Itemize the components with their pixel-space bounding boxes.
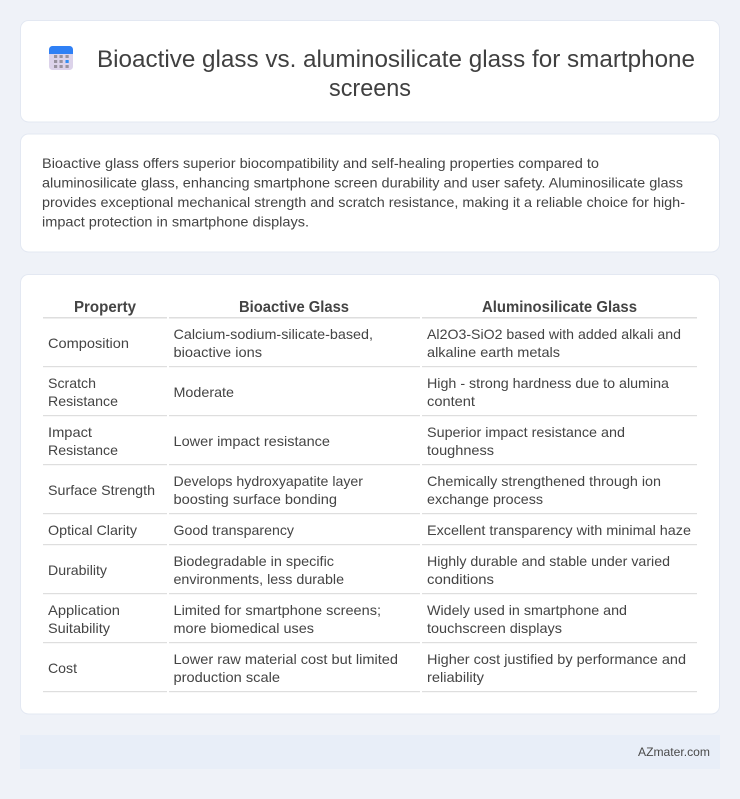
row: Optical Clarity	[48, 522, 691, 538]
row: Impact Resistance: Impact	[48, 424, 92, 440]
footer bar	[20, 735, 720, 769]
description text: impact protection in smartphone displays.	[42, 214, 309, 230]
panel: description card	[20, 134, 720, 252]
row: Optical Clarity: Excellent transparency with minimal haze	[427, 522, 691, 538]
table header row	[74, 299, 637, 316]
panel: title card	[20, 20, 720, 122]
row: Durability: Durability	[48, 562, 107, 578]
row: Durability: Highly durable and stable under varied	[427, 553, 670, 569]
row: Durability: environments, less durable	[174, 571, 344, 587]
description text: provides exceptional mechanical strength and scratch resistance, making it a reliable choice for high-	[42, 194, 685, 210]
row: Scratch Resistance: High - strong hardness due to alumina	[427, 375, 669, 391]
row: Surface Strength: boosting surface bonding	[174, 491, 337, 507]
row: Durability	[48, 553, 670, 587]
row: Scratch Resistance: content	[427, 393, 475, 409]
row: Impact Resistance	[48, 424, 625, 458]
row: Composition: Composition	[48, 335, 129, 351]
table header row: Aluminosilicate Glass	[482, 299, 637, 316]
row: Surface Strength: Chemically strengthened through ion	[427, 473, 661, 489]
row: Application Suitability: more biomedical uses	[174, 620, 314, 636]
row: Scratch Resistance: Resistance	[48, 393, 118, 409]
table header row: Bioactive Glass	[239, 299, 349, 316]
panel: comparison table	[20, 274, 720, 714]
row: Application Suitability: Application	[48, 602, 120, 618]
row: Composition: alkaline earth metals	[427, 344, 560, 360]
row: Composition: Calcium-sodium-silicate-based,	[174, 326, 373, 342]
row: Durability: Biodegradable in specific	[174, 553, 334, 569]
row: Cost: Higher cost justified by performance and	[427, 651, 686, 667]
row: Application Suitability	[48, 602, 627, 636]
row: Optical Clarity: Optical Clarity	[48, 522, 137, 538]
row: Application Suitability: Suitability	[48, 620, 110, 636]
row: Cost: production scale	[174, 669, 280, 685]
row: Composition: Al2O3-SiO2 based with added alkali and	[427, 326, 681, 342]
description text	[42, 155, 685, 230]
row: Scratch Resistance: Scratch	[48, 375, 96, 391]
row: Composition: bioactive ions	[174, 344, 262, 360]
row: Impact Resistance: toughness	[427, 442, 494, 458]
row: Durability: conditions	[427, 571, 494, 587]
title: Bioactive glass vs. aluminosilicate glass for smartphone	[97, 46, 695, 73]
row: Application Suitability: Widely used in smartphone and	[427, 602, 627, 618]
row: Impact Resistance: Lower impact resistance	[174, 433, 330, 449]
row: Optical Clarity: Good transparency	[174, 522, 294, 538]
footer bar: AZmater.com	[638, 745, 710, 759]
description text: Bioactive glass offers superior biocompatibility and self-healing properties compared to	[42, 155, 599, 171]
row: Cost: Lower raw material cost but limited	[174, 651, 398, 667]
row: Surface Strength: Develops hydroxyapatite layer	[174, 473, 363, 489]
row: Application Suitability: Limited for smartphone screens;	[174, 602, 381, 618]
row: Cost: reliability	[427, 669, 484, 685]
title: screens	[329, 75, 411, 102]
row: Scratch Resistance	[48, 375, 669, 409]
row: Cost	[48, 651, 686, 685]
icon: calendar	[49, 46, 73, 70]
row: Surface Strength: exchange process	[427, 491, 543, 507]
row: Surface Strength	[48, 473, 661, 507]
row: Scratch Resistance: Moderate	[174, 384, 234, 400]
row: Cost: Cost	[48, 660, 77, 676]
row: Impact Resistance: Resistance	[48, 442, 118, 458]
title	[97, 46, 695, 102]
table header row: Property	[74, 299, 136, 316]
row: Impact Resistance: Superior impact resistance and	[427, 424, 625, 440]
row: Composition	[48, 326, 681, 360]
description text: aluminosilicate glass, enhancing smartphone screen durability and user safety. Aluminosilicate glass	[42, 174, 683, 190]
row: Application Suitability: touchscreen displays	[427, 620, 562, 636]
row: Surface Strength: Surface Strength	[48, 482, 155, 498]
